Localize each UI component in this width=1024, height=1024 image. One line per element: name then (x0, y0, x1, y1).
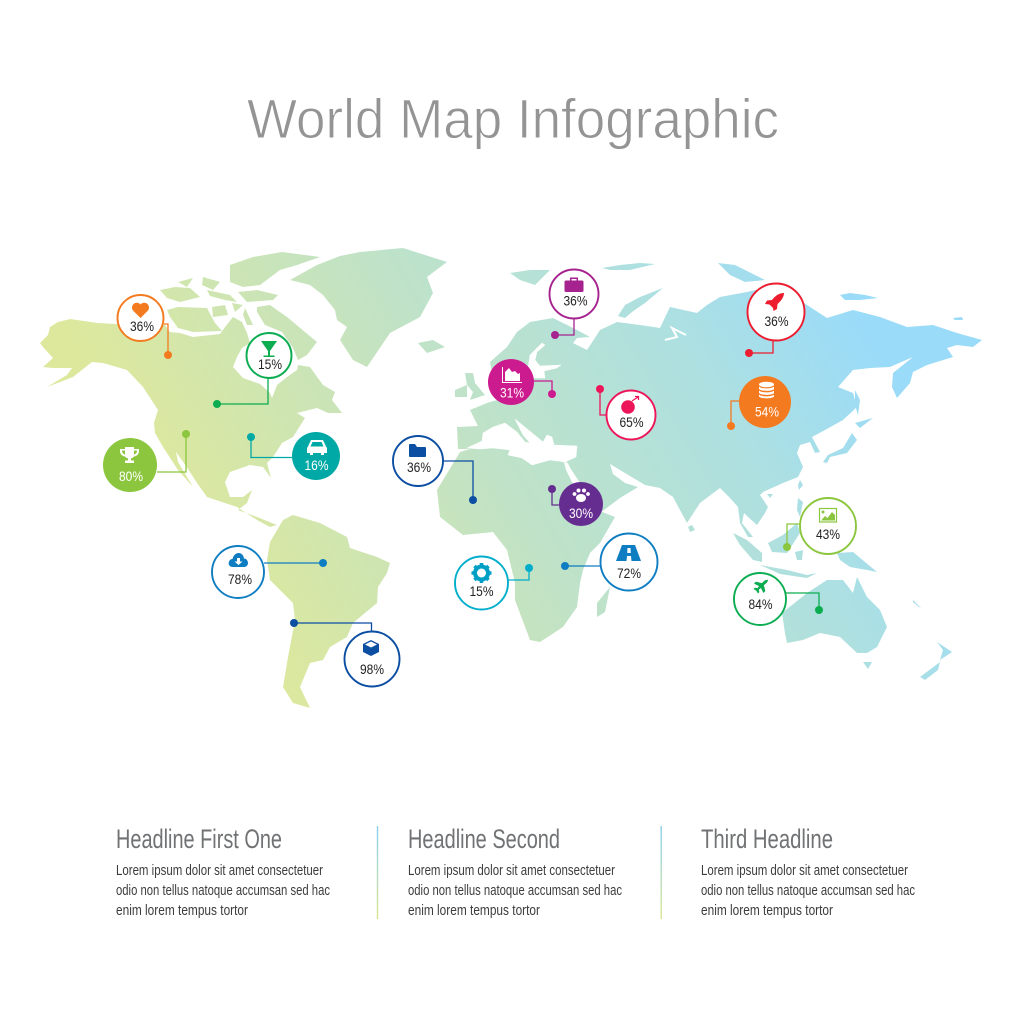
callout: purple paw 30% (548, 482, 603, 526)
icon: bomb (621, 396, 638, 414)
callout: purple suitcase 36% (550, 270, 598, 339)
callout: crimson bomb 65% (596, 385, 656, 440)
callout: lime trophy 80%: 80% (119, 469, 143, 484)
icon: heart (132, 303, 149, 318)
title: World Map Infographic (247, 87, 779, 150)
callout: green cocktail 15%: 15% (258, 357, 282, 372)
callout: blue cloud 78% (212, 546, 327, 598)
callout: blue road 72% (561, 534, 658, 590)
callout: magenta chart 31% (488, 359, 556, 405)
column: headline second: Lorem ipsum dolor sit amet consectetuer (408, 863, 615, 879)
callout: green plane 84% (734, 573, 823, 625)
callout: orange heart 36%: 36% (130, 319, 154, 334)
world map (40, 248, 982, 708)
callout: lime image 43%: 43% (816, 527, 840, 542)
callout: orange heart 36% (118, 295, 172, 359)
icon: suitcase (564, 278, 584, 292)
callout: blue cloud 78%: 78% (228, 572, 252, 587)
icon: picture (820, 508, 836, 522)
callout: red rocket 36%: 36% (764, 314, 788, 329)
icon: rocket (765, 293, 784, 311)
column: headline second: enim lorem tempus tortor (408, 903, 540, 919)
icon: folder (409, 444, 426, 457)
North America (40, 317, 342, 527)
Greenland (290, 248, 447, 367)
callout: green cocktail 15% (213, 333, 292, 408)
callout: navy folder 36%: 36% (407, 460, 431, 475)
column: headline first one: odio non tellus natoque accumsan sed hac (116, 883, 330, 899)
callout: teal car 16% (247, 432, 340, 480)
icon: gear (472, 563, 492, 583)
icon: cloud download (229, 553, 248, 567)
callout: teal car 16%: 16% (304, 458, 328, 473)
icon: car (307, 440, 327, 455)
callout: green plane 84%: 84% (748, 597, 772, 612)
icon: paw (573, 488, 590, 502)
icon: cocktail glass (261, 341, 277, 357)
column: third headline (701, 824, 915, 919)
callout: cyan gear 15% (455, 556, 533, 610)
column: headline first one (116, 824, 330, 919)
South America (267, 515, 390, 708)
callout: crimson bomb 65%: 65% (620, 415, 644, 430)
callout: blue road 72%: 72% (617, 566, 641, 581)
callout: navy cube 98% (290, 619, 400, 686)
column: third headline: Third Headline (701, 824, 833, 854)
callout: purple suitcase 36%: 36% (564, 294, 588, 308)
callout: magenta chart 31%: 31% (500, 386, 524, 400)
Eurasia (457, 285, 982, 537)
callout: orange database 54% (727, 376, 791, 430)
column: third headline: odio non tellus natoque accumsan sed hac (701, 883, 915, 899)
column: headline first one: Headline First One (116, 824, 282, 854)
icon: road (616, 545, 641, 561)
callout: cyan gear 15%: 15% (470, 584, 494, 599)
icon: database (759, 382, 774, 398)
icon: airplane (754, 580, 768, 593)
callout: orange database 54%: 54% (755, 404, 779, 420)
callout: lime image 43% (783, 498, 856, 554)
icon: cube (363, 640, 379, 656)
Iceland (418, 340, 445, 353)
column: headline first one: Lorem ipsum dolor sit amet consectetuer (116, 863, 323, 879)
callout: lime trophy 80% (103, 430, 190, 492)
column: headline second: odio non tellus natoque accumsan sed hac (408, 883, 622, 899)
callout: red rocket 36% (745, 284, 804, 357)
Africa (437, 446, 615, 642)
Australia (782, 577, 887, 653)
callout: purple paw 30%: 30% (569, 506, 593, 521)
callout: navy cube 98%: 98% (360, 662, 384, 677)
column: third headline: Lorem ipsum dolor sit amet consectetuer (701, 863, 908, 879)
Mediterranean, Baltic, Red Sea and Ob gulf cut-outs (467, 328, 686, 487)
callout: navy folder 36% (393, 436, 477, 504)
column: third headline: enim lorem tempus tortor (701, 903, 833, 919)
Canadian Arctic islands (160, 252, 320, 360)
column: headline second (408, 824, 622, 919)
icon: trophy (120, 447, 139, 463)
icon: area chart (502, 367, 522, 383)
islands of Europe, Asia and Oceania (455, 263, 963, 680)
column: headline first one: enim lorem tempus tortor (116, 903, 248, 919)
column: headline second: Headline Second (408, 824, 560, 854)
